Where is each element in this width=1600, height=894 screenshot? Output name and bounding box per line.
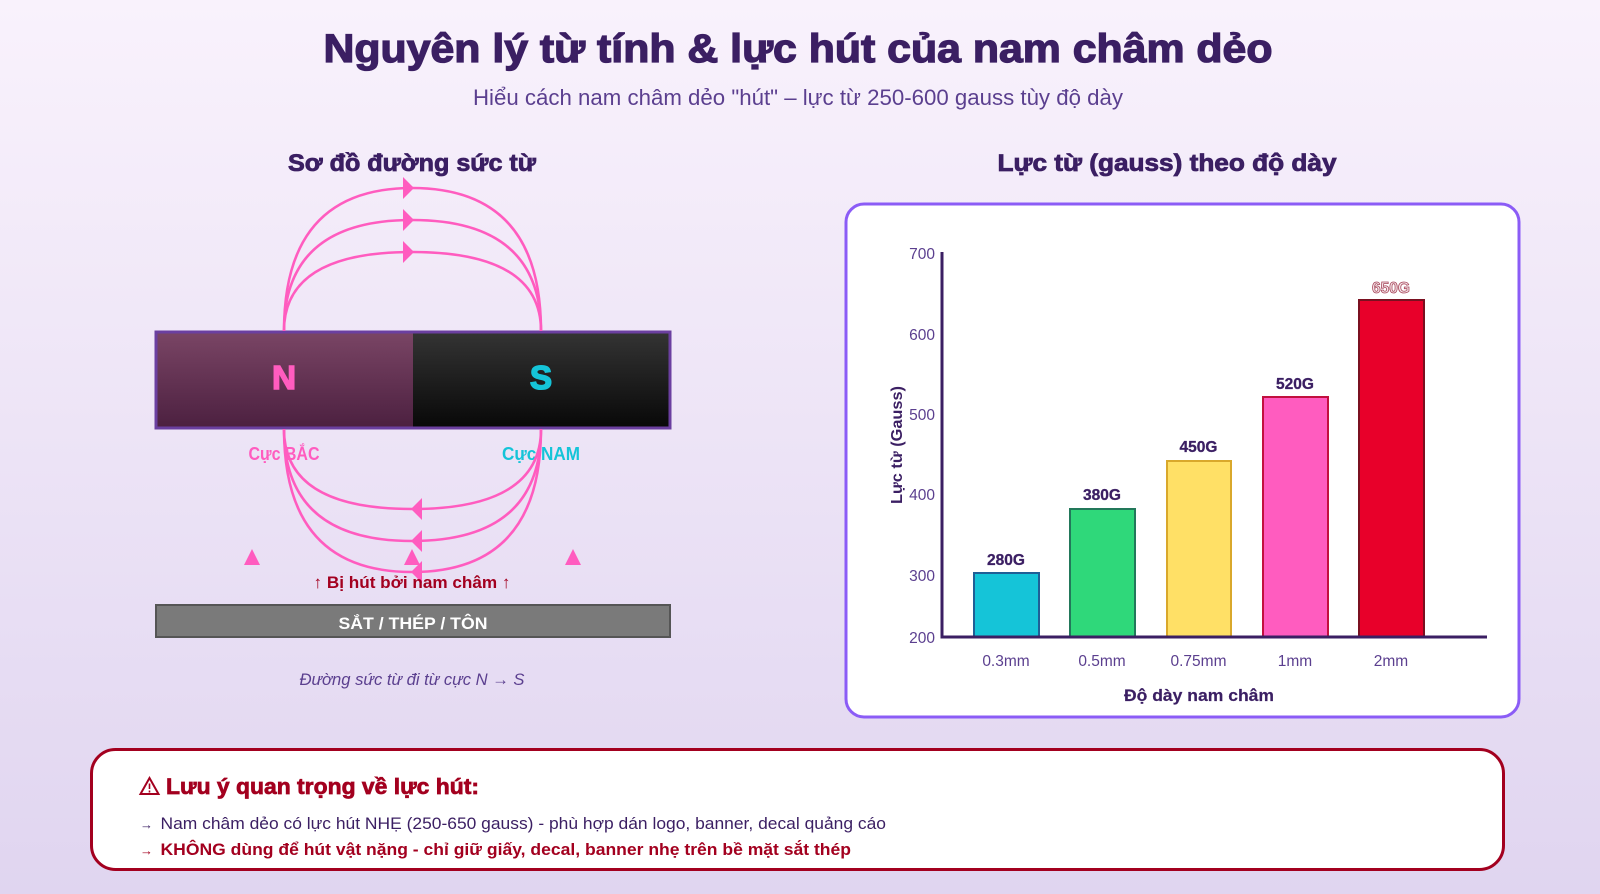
x axis title: Độ dày nam châm xyxy=(1124,686,1274,705)
note line 1: → xyxy=(140,817,153,832)
iron plate xyxy=(156,605,670,637)
subtitle: Hiểu cách nam châm dẻo "hút" – lực từ 250-600 gauss tùy độ dày xyxy=(473,85,1123,110)
note line 1: Nam châm dẻo có lực hút NHẸ (250-650 gauss) - phù hợp dán logo, banner, decal quảng cáo xyxy=(160,814,886,833)
x axis labels xyxy=(982,653,1408,670)
bar value labels: 650G xyxy=(1372,280,1410,297)
y axis tick labels xyxy=(909,246,935,647)
bar value labels: 280G xyxy=(987,552,1025,569)
icon: warning xyxy=(140,778,158,794)
bar magnet xyxy=(156,332,670,428)
bar: 0.75mm xyxy=(1167,461,1231,637)
chart card xyxy=(846,204,1519,717)
bar: 0.5mm xyxy=(1070,509,1135,637)
panel: magnetic field diagram xyxy=(156,150,670,689)
x axis labels: 0.75mm xyxy=(1170,653,1226,670)
y axis tick labels: 600 xyxy=(909,327,935,344)
y axis tick labels: 400 xyxy=(909,487,935,504)
bar value labels: 380G xyxy=(1083,487,1121,504)
letter S: S xyxy=(530,359,552,396)
attraction arrows xyxy=(244,549,581,565)
axes xyxy=(942,252,1487,637)
heading: chart: Lực từ (gauss) theo độ dày xyxy=(998,150,1337,177)
bar: 2mm xyxy=(1359,300,1424,637)
note line 2: KHÔNG dùng để hút vật nặng - chỉ giữ giấy, decal, banner nhẹ trên bề mặt sắt thép xyxy=(160,840,851,859)
letter N: N xyxy=(272,359,296,396)
x axis labels: 0.3mm xyxy=(982,653,1030,670)
y axis tick labels: 700 xyxy=(909,246,935,263)
plate label: SẮT / THÉP / TÔN xyxy=(338,614,488,633)
title: Nguyên lý từ tính & lực hút của nam châm dẻo xyxy=(324,27,1272,71)
diagram caption: Đường sức từ đi từ cực N → S xyxy=(300,670,525,689)
lower field lines xyxy=(284,429,541,583)
pole label: south: Cực NAM xyxy=(502,444,580,464)
note heading: Lưu ý quan trọng về lực hút: xyxy=(166,774,479,799)
y axis tick labels: 200 xyxy=(909,630,935,647)
bar: 1mm xyxy=(1263,397,1328,637)
bar value labels: 450G xyxy=(1180,439,1217,456)
note line 2: → xyxy=(140,843,153,858)
heading: field diagram: Sơ đồ đường sức từ xyxy=(288,150,537,177)
bar: 0.3mm xyxy=(974,573,1039,637)
north pole xyxy=(156,332,413,428)
upper field lines xyxy=(284,177,541,331)
south pole xyxy=(413,332,670,428)
bar value labels xyxy=(987,280,1410,569)
x axis labels: 1mm xyxy=(1278,653,1312,670)
y axis tick labels: 300 xyxy=(909,568,935,585)
bar value labels: 520G xyxy=(1276,376,1314,393)
y axis title: Lực từ (Gauss) xyxy=(889,386,906,504)
attraction label: ↑ Bị hút bởi nam châm ↑ xyxy=(314,573,510,592)
y axis tick labels: 500 xyxy=(909,407,935,424)
x axis labels: 2mm xyxy=(1374,653,1408,670)
pole label: north: Cực BẮC xyxy=(248,443,320,464)
callout: important note xyxy=(92,750,1504,870)
x axis labels: 0.5mm xyxy=(1078,653,1126,670)
panel: gauss chart xyxy=(846,150,1519,717)
